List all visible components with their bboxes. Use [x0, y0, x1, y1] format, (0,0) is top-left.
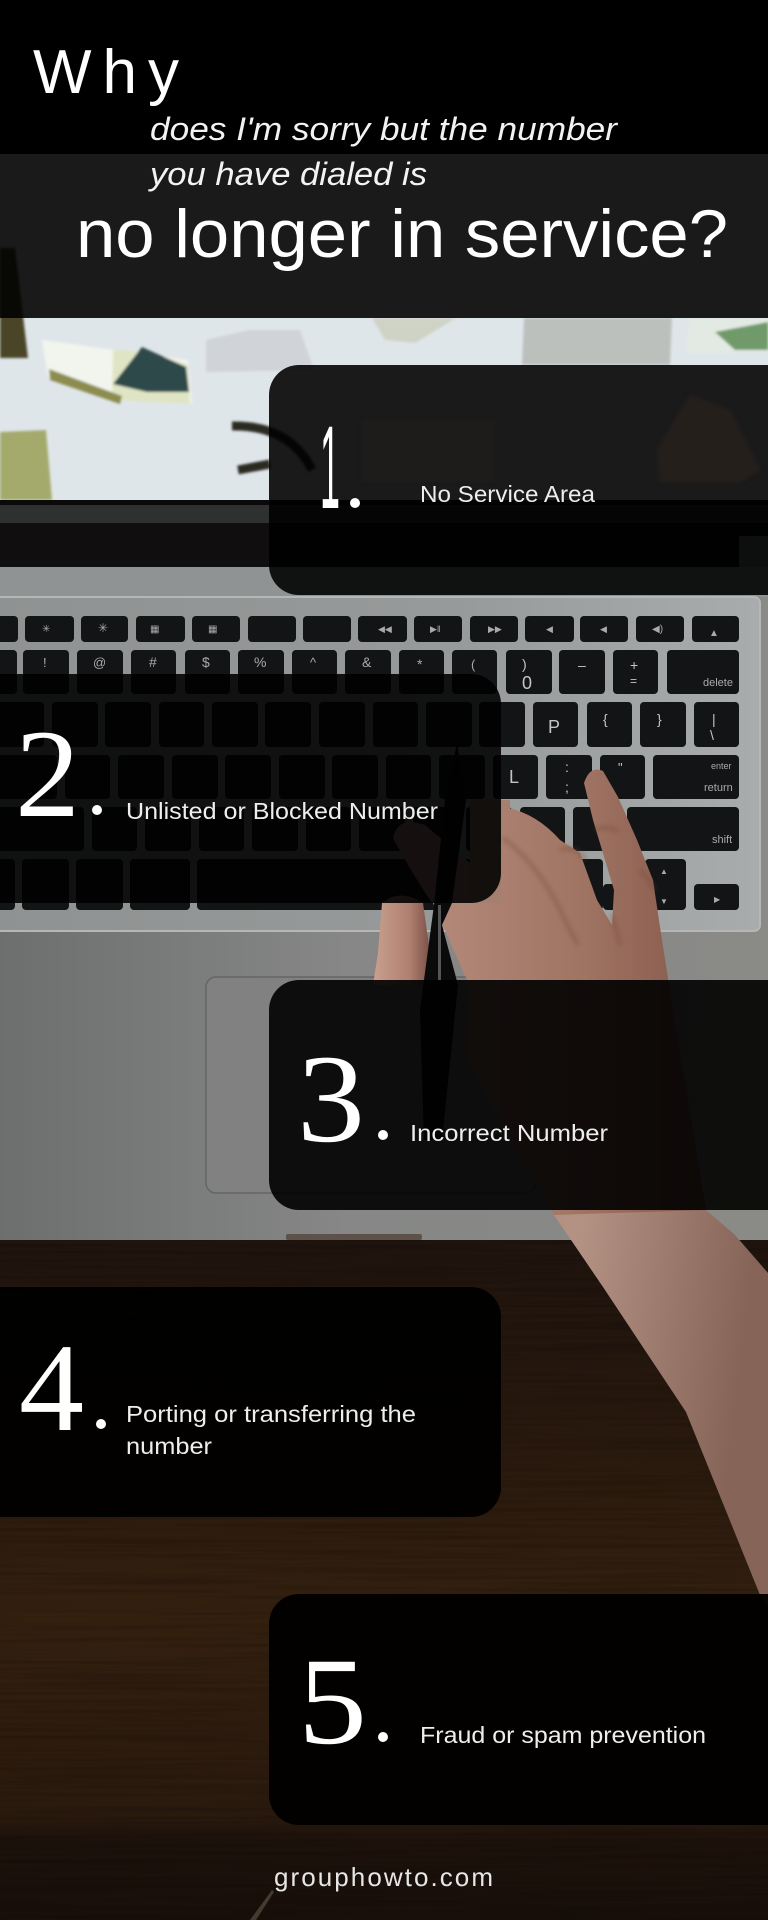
label: No Service Area: No Service Area [420, 481, 595, 507]
title: italic line two: you have dialed is [148, 156, 427, 192]
number 2: 2 [15, 705, 80, 844]
key legends: # [149, 654, 157, 670]
key legends: ◀◀ [378, 624, 392, 634]
key legends: } [657, 711, 662, 727]
key legends: ◀ [600, 624, 607, 634]
key legends: $ [202, 654, 210, 670]
card background 5 [269, 1594, 768, 1825]
keyboard well [0, 597, 760, 931]
key legends: + [630, 657, 638, 673]
key legends: ▶ [714, 895, 721, 904]
panel: reason 3 [269, 980, 768, 1210]
label: Porting or transferring the number [126, 1401, 416, 1459]
key legends: ) [522, 656, 527, 672]
key legends: = [630, 674, 637, 688]
key legends: & [362, 654, 372, 670]
key legends: ▶▶ [488, 624, 502, 634]
number 3: 3 [297, 1030, 365, 1169]
key legends: { [603, 711, 608, 727]
title [33, 38, 728, 272]
key legends: ▲ [660, 867, 668, 876]
key legends: ( [471, 657, 476, 672]
hinge tab [286, 1234, 422, 1240]
hand holding pen [373, 743, 768, 1608]
number 1: 1 [320, 402, 340, 534]
card background 2 [0, 674, 501, 903]
laptop bezel [0, 500, 768, 567]
number 5: 5 [298, 1633, 367, 1770]
key legends: ▦ [150, 624, 159, 635]
key legends: P [548, 717, 560, 737]
key legends: ^ [310, 655, 317, 670]
key legends: ▦ [208, 624, 217, 635]
wooden desk [0, 1240, 768, 1920]
key legends: ▲ [709, 628, 719, 639]
key legends: return [704, 782, 733, 794]
key legends: delete [703, 677, 733, 689]
panel: reason 4 [0, 1287, 501, 1517]
header panel: black band [0, 154, 768, 318]
key legends: ✳ [42, 624, 50, 635]
label: Porting or transferring the number: number [126, 1433, 212, 1459]
key legends: ; [565, 779, 569, 795]
key legends: ▼ [660, 897, 668, 906]
card background 3 [269, 980, 768, 1210]
title: Why: Why [33, 38, 179, 107]
label: Incorrect Number: Incorrect Number [410, 1120, 608, 1146]
pinky finger [373, 896, 434, 985]
pen [420, 743, 466, 1140]
title: main line: no longer in service? [76, 196, 728, 272]
number 3 [297, 1030, 388, 1169]
key legends: | [712, 711, 716, 727]
panel: reason 5 [269, 1594, 768, 1825]
key legends: ! [43, 655, 47, 670]
back of hand [433, 770, 706, 1215]
keyboard keys [0, 616, 739, 910]
label: Fraud or spam prevention: Fraud or spam prevention [420, 1722, 706, 1748]
title: italic line one: does I'm sorry but the number [150, 111, 618, 147]
key legends: % [254, 654, 266, 670]
label: Unlisted or Blocked Number: Unlisted or Blocked Number [126, 798, 438, 824]
key legends: – [578, 657, 586, 673]
key legends: enter [711, 761, 732, 771]
key legends [42, 621, 733, 906]
number 1 [320, 402, 360, 534]
number 4: 4 [19, 1319, 84, 1458]
number 5 [298, 1633, 388, 1770]
card background 1 [269, 365, 768, 595]
footer: website: grouphowto.com [274, 1862, 493, 1892]
laptop deck [0, 567, 768, 1240]
key legends: ◀) [652, 624, 663, 635]
card background 4 [0, 1287, 501, 1517]
key legends: ▶‖ [430, 624, 441, 634]
finger shading [503, 828, 655, 945]
key legends: ◀ [546, 624, 553, 634]
key legends: shift [712, 834, 732, 846]
key legends: : [565, 759, 569, 775]
key legends: ✳ [98, 621, 108, 635]
panel: reason 1 [269, 365, 768, 595]
label: Porting or transferring the number: Porting or transferring the [126, 1401, 416, 1427]
key legends: 0 [522, 673, 532, 693]
key legends: " [618, 760, 623, 775]
thumb under card [393, 822, 492, 903]
key legends: L [509, 767, 519, 787]
key legends: \ [710, 727, 714, 743]
panel: reason 2 [0, 674, 501, 903]
arm [466, 980, 768, 1608]
trackpad [206, 977, 536, 1193]
faint photo patches seen through card [362, 395, 760, 482]
key legends: * [417, 656, 423, 672]
key legends: @ [93, 655, 106, 670]
laptop screen [0, 0, 768, 501]
